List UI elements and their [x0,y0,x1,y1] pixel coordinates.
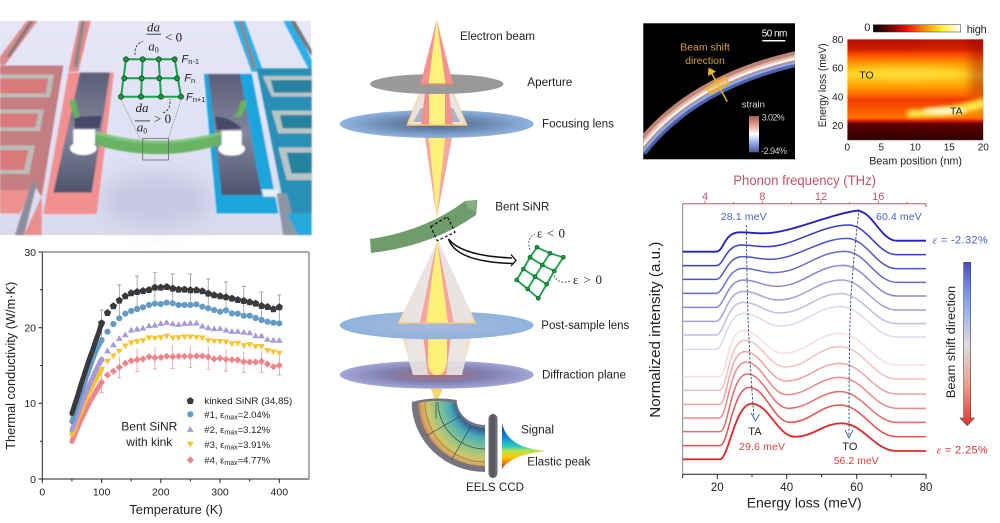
annotation: Bent SiNR with kink: with kink [125,435,173,449]
legend: #4, ε [204,456,224,466]
strain labels: F [184,72,191,84]
series: #2 [102,322,279,359]
strain labels: 0 [155,46,159,54]
beam shift label: Beam shift [680,42,730,54]
legend: #3, ε [204,440,224,451]
y axis title: Thermal conductivity (W/m·K) [4,282,18,450]
legend: =3.12% [238,425,271,436]
strain endpoint labels [933,234,988,456]
legend: #1, ε [204,410,224,421]
beam to diffraction plane [402,335,472,375]
panel: heatmap [817,22,990,167]
heatmap image [847,39,984,140]
top axis: 8 [759,191,765,203]
panel: strain map [639,23,800,159]
beam through focusing lens [407,93,467,125]
legend: #2, ε [204,425,224,436]
legend: max [224,430,238,436]
annotation: Bent SiNR with kink: Bent SiNR [121,420,178,434]
electron beam cone [420,20,453,84]
aperture [370,74,503,94]
converging beam [425,138,452,218]
peak annotations: 56.2 meV [834,455,879,467]
strain legend [742,100,787,156]
heatmap axes: 10 [910,142,921,154]
legend [190,396,292,467]
series: kinked SiNR [102,287,279,323]
axis tick labels: 0 [30,474,36,486]
series: #1 dense low temperature trace [72,340,102,422]
y axis title: Normalized intensity (a.u.) [648,242,664,418]
chart: EELS spectra [648,173,988,510]
legend: max [224,460,238,467]
top axis: 16 [872,191,884,203]
x axis title: Temperature (K) [129,503,223,517]
TO and TA labels: TO [859,70,874,82]
bent lattice: ε > 0 [573,272,602,287]
heatmap colour bar: 0 [864,22,870,34]
legend: =3.91% [238,440,271,451]
spectrometer prism [412,398,485,472]
beam shift direction label: Beam shift direction [946,286,958,398]
signal fan [502,423,546,469]
strain labels: n-1 [188,57,199,66]
TA dashed guide and arrow [746,225,760,421]
top axis title: Phonon frequency (THz) [733,173,876,188]
legend: max [224,414,238,422]
strain labels: a [137,120,143,134]
legend: kinked SiNR (34,85) [204,396,292,407]
peak annotations: 60.4 meV [876,211,922,223]
axis tick labels: 200 [152,486,170,498]
strain labels: da [136,100,149,115]
legend: =4.77% [238,456,271,466]
strain legend: 3.02% [762,113,785,123]
heatmap axes: Energy loss (meV) [817,43,829,127]
heatmap colour bar: high [967,24,987,36]
annotation: Bent SiNR with kink [121,420,178,449]
bottom axis labels: 80 [920,482,932,494]
schematic labels: Post-sample lens [541,320,630,332]
axis tick labels: 400 [271,486,288,498]
peak annotations: 29.6 meV [739,441,785,453]
series: #2 dense low temperature trace [72,359,102,430]
beam shift box [706,77,729,94]
strain labels: da [147,20,160,34]
EELS CCD detector [488,414,498,478]
strain labels: n+1 [193,95,205,104]
series: #1 [102,303,279,340]
heatmap axes: 0 [845,142,851,154]
strain endpoint labels: ε = -2.32% [933,234,988,246]
schematic labels: Focusing lens [542,119,614,131]
peak annotations: 28.1 meV [721,211,767,223]
TO and TA labels: TA [950,106,963,118]
focusing lens [340,110,534,138]
scale bar: 50 nm [762,28,787,40]
axes [38,252,309,483]
spectra curves [683,211,926,459]
schematic labels: Signal [521,424,554,436]
TO dashed guide and arrow [845,209,859,438]
error bars [100,273,281,338]
beam to spectrometer [431,389,443,403]
axis tick labels: 0 [39,486,45,498]
beam shift direction arrow [960,262,974,426]
strain labels: > 0 [154,111,171,126]
top axis: 4 [702,191,708,203]
frame and bottom axis [683,204,926,479]
heatmap axes: 80 [832,35,844,46]
axis tick labels: 30 [24,247,36,259]
strained arc [643,51,795,155]
axis tick labels: 100 [93,486,111,498]
heatmap axes: 15 [944,142,955,154]
strain labels: n [191,76,195,85]
schematic labels: Diffraction plane [542,369,626,381]
top axis: 12 [815,191,827,203]
series: kinked dense low temperature trace [72,323,102,414]
strain endpoint labels: ε = 2.25% [937,444,988,456]
schematic labels: Bent SiNR [495,202,549,214]
curved arrow [448,239,516,266]
heatmap axes [817,35,989,167]
beam shift label: direction [685,55,725,67]
strain labels: < 0 [165,30,182,44]
strain legend: strain [742,100,765,111]
heatmap axes: 40 [832,92,844,103]
peak annotations: TA [748,426,762,438]
x axis title: Energy loss (meV) [747,494,862,510]
chart: thermal conductivity [4,247,309,517]
axis tick labels [24,247,288,498]
schematic labels: EELS CCD [466,482,524,494]
series: #3 dense low temperature trace [72,369,102,434]
series: #4 dense low temperature trace [72,382,102,441]
bottom axis labels: 20 [711,482,724,494]
diverging beam [398,240,476,323]
heatmap colour bar [864,22,987,36]
strain labels: F [182,54,188,66]
bottom axis labels: 60 [850,482,863,494]
strain labels [135,20,205,136]
panel: EELS schematic [340,20,630,494]
legend: =2.04% [238,410,271,421]
axis tick labels: 20 [24,322,36,334]
axis tick labels: 10 [24,398,36,410]
schematic labels: Elastic peak [527,456,591,468]
heatmap axes: 5 [879,142,885,154]
schematic labels: Electron beam [460,31,535,43]
strain legend: -2.94% [761,146,787,156]
bottom axis labels: 40 [780,482,793,494]
series: #3 [102,336,279,369]
diffraction plane [340,361,534,389]
peak annotations [721,211,922,467]
beam shift label [680,42,730,67]
device structure [0,21,312,235]
inset lattice [118,42,184,160]
legend: max [224,444,238,452]
dashed selection box [431,217,455,241]
heatmap axes: 20 [978,142,989,154]
heatmap axes: 60 [832,64,844,74]
panel: device illustration [0,20,312,235]
strain labels: a [148,38,155,54]
schematic labels: Aperture [527,77,572,89]
bent lattice: ε < 0 [537,226,565,240]
top axis [683,191,926,204]
bent lattice [515,226,602,300]
peak annotations: TO [842,441,858,453]
bent SiNR [370,200,477,253]
axis tick labels: 300 [211,486,229,498]
schematic labels [460,31,630,494]
series: #4 [102,356,279,382]
strain labels: F [186,92,193,104]
heatmap axes: Beam position (nm) [869,155,962,167]
heatmap axes: 20 [832,121,844,132]
strain labels: 0 [143,126,147,136]
beam shift arrow [708,68,727,102]
TO and TA labels [859,70,963,118]
post-sample lens [340,311,534,339]
bottom axis labels [711,482,932,494]
